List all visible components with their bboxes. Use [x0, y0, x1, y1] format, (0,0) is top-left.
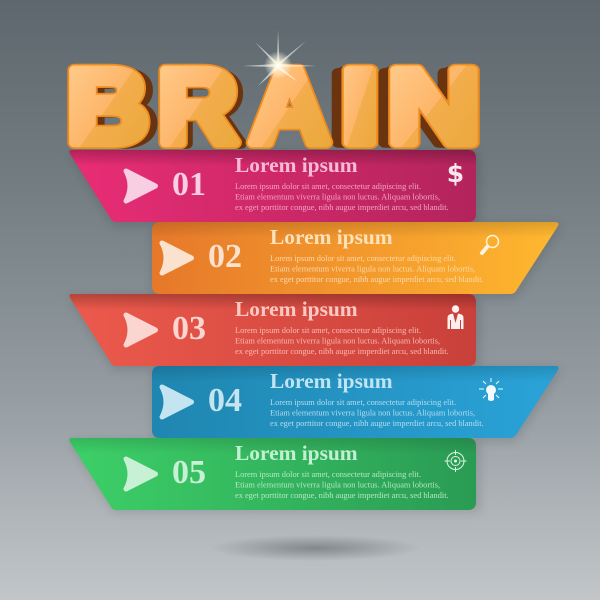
sparkle — [243, 30, 316, 86]
band shadows — [69, 152, 562, 512]
letter N: N — [388, 48, 480, 165]
body text 05: ex eget porttitor congue, nibh augue imperdiet arcu, sed blandit. — [235, 491, 449, 500]
number 04: 04 — [208, 382, 242, 419]
heading 01: Lorem ipsum — [235, 153, 358, 177]
arrow 05 — [126, 459, 156, 489]
heading 03: Lorem ipsum — [235, 297, 358, 321]
panel: step 05 — [69, 438, 476, 510]
icon: magnifier — [482, 236, 498, 253]
heading 02: Lorem ipsum — [270, 225, 393, 249]
number 02: 02 — [208, 238, 242, 275]
panel: step 01 — [69, 150, 476, 222]
arrow 02 — [162, 243, 192, 273]
letter A: A — [250, 48, 329, 165]
body text 04: ex eget porttitor congue, nibh augue imperdiet arcu, sed blandit. — [270, 419, 484, 428]
letter A: A — [250, 48, 329, 165]
body text 02: Etiam elementum viverra ligula non luctus. Aliquam lobortis, — [270, 264, 475, 274]
letter I: I — [335, 50, 374, 164]
panel: step 03 — [69, 294, 476, 366]
arrow 04 — [162, 387, 192, 417]
letter R: R — [164, 50, 243, 166]
icon: person — [448, 305, 464, 329]
body text 01: ex eget porttitor congue, nibh augue imperdiet arcu, sed blandit. — [235, 203, 449, 212]
floor shadow — [210, 535, 420, 561]
icon: dollar: $ — [447, 159, 464, 188]
letter B: B — [70, 50, 152, 166]
body text 04: Lorem ipsum dolor sit amet, consectetur adipiscing elit. — [270, 398, 456, 407]
arrow 03 — [126, 315, 156, 345]
letter I: I — [330, 51, 368, 164]
letter R: R — [158, 48, 237, 165]
letter I: I — [341, 49, 379, 166]
icon: light bulb — [479, 378, 503, 401]
letter R: R — [160, 49, 240, 165]
body text 03: Lorem ipsum dolor sit amet, consectetur adipiscing elit. — [235, 326, 421, 335]
letter B: B — [67, 48, 149, 166]
letter N: N — [376, 52, 469, 164]
body text 03: Etiam elementum viverra ligula non luctus. Aliquam lobortis, — [235, 336, 440, 346]
panel: step 04 — [152, 366, 559, 438]
body text 02: Lorem ipsum dolor sit amet, consectetur adipiscing elit. — [270, 254, 456, 263]
body text 01: Etiam elementum viverra ligula non luctus. Aliquam lobortis, — [235, 192, 440, 202]
letter R: R — [158, 48, 237, 165]
body text 02: ex eget porttitor congue, nibh augue imperdiet arcu, sed blandit. — [270, 275, 484, 284]
body text 01: Lorem ipsum dolor sit amet, consectetur adipiscing elit. — [235, 182, 421, 191]
body text 03: ex eget porttitor congue, nibh augue imperdiet arcu, sed blandit. — [235, 347, 449, 356]
letter B: B — [67, 48, 149, 166]
number 05: 05 — [172, 454, 206, 491]
letter N: N — [382, 50, 475, 165]
number 01: 01 — [172, 166, 206, 203]
body text 05: Lorem ipsum dolor sit amet, consectetur adipiscing elit. — [235, 470, 421, 479]
title: BRAIN 3D lettering — [67, 48, 480, 166]
letter I: I — [341, 49, 379, 166]
letter N: N — [388, 48, 480, 165]
letter B: B — [75, 50, 157, 165]
icon: target — [444, 450, 466, 472]
number 03: 03 — [172, 310, 206, 347]
panel: step 02 — [152, 222, 559, 294]
arrow 01 — [126, 171, 156, 201]
heading 05: Lorem ipsum — [235, 441, 358, 465]
body text 04: Etiam elementum viverra ligula non luctus. Aliquam lobortis, — [270, 408, 475, 418]
body text 05: Etiam elementum viverra ligula non luctus. Aliquam lobortis, — [235, 480, 440, 490]
heading 04: Lorem ipsum — [270, 369, 393, 393]
